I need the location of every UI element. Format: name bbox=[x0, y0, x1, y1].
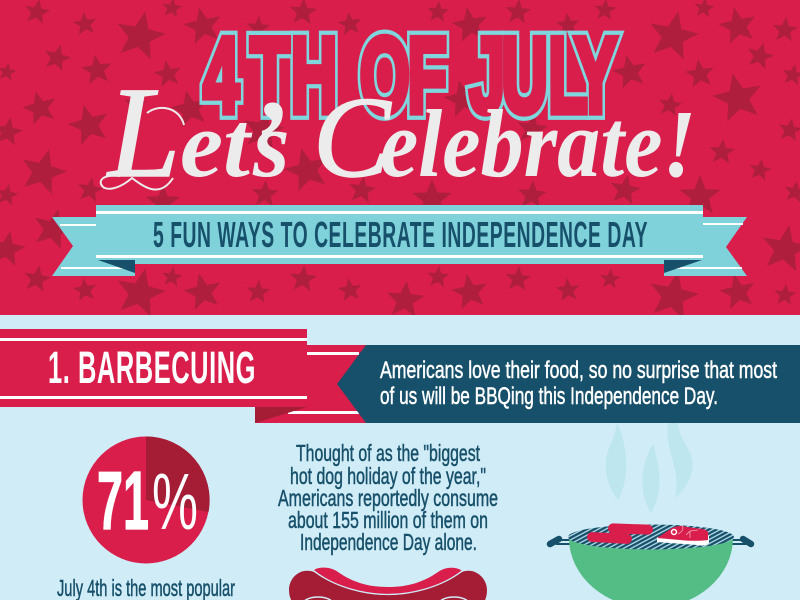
icon: grill smoke bbox=[606, 423, 693, 513]
panel: intro callout bbox=[337, 345, 800, 423]
title: Let's Celebrate script: et bbox=[180, 93, 253, 197]
panel: barbecuing section background bbox=[0, 315, 800, 600]
ribbon fold bbox=[255, 407, 307, 423]
icon: hot dog bbox=[289, 568, 487, 600]
title: Let's Celebrate script: L bbox=[106, 61, 180, 205]
text: hot dog fact: about 155 million of them on bbox=[288, 507, 488, 533]
ribbon tail left bbox=[52, 217, 135, 276]
grill bowl bbox=[569, 538, 733, 600]
ribbon back tail bbox=[255, 345, 370, 423]
text: hot dog fact: Thought of as the "biggest bbox=[296, 440, 480, 466]
title: 4th of July: 4TH OF JULY bbox=[203, 15, 617, 135]
sausage bottom bbox=[587, 532, 632, 544]
text: hot dog fact: Americans reportedly consume bbox=[278, 485, 498, 511]
chart: 71% pie bbox=[82, 436, 210, 564]
heading text: 1. BARBECUING bbox=[48, 342, 256, 393]
title: Let's Celebrate script: elebrate! bbox=[380, 90, 696, 197]
grill grate bbox=[568, 524, 734, 550]
sausage top bbox=[608, 523, 653, 535]
title: Let's Celebrate script: C bbox=[313, 74, 392, 202]
panel: red star header background bbox=[0, 0, 800, 321]
ribbon tail right bbox=[664, 217, 747, 276]
stat: 71 percent: % bbox=[152, 457, 198, 546]
ribbon fold left bbox=[98, 260, 135, 273]
title: 4th of July: 4TH OF JULY bbox=[203, 15, 617, 135]
title: Let's Celebrate script: ’ bbox=[250, 78, 287, 200]
text: hot dog fact: Independence Day alone. bbox=[300, 529, 477, 555]
ribbon front bbox=[0, 329, 307, 407]
text: hot dog fact: hot dog holiday of the year," bbox=[290, 463, 486, 489]
banner: 5 fun ways ribbon bbox=[52, 205, 747, 276]
grill handles bbox=[550, 539, 751, 544]
title: Let's Celebrate script bbox=[101, 61, 696, 205]
stat: 71 percent: 71 bbox=[97, 454, 149, 547]
ribbon band bbox=[96, 205, 703, 264]
heading: 1. Barbecuing ribbon bbox=[0, 329, 370, 423]
icon: grill bbox=[550, 523, 751, 600]
title: Let's Celebrate script: s bbox=[252, 93, 290, 197]
steak bbox=[657, 525, 709, 546]
ribbon fold right bbox=[664, 260, 702, 273]
